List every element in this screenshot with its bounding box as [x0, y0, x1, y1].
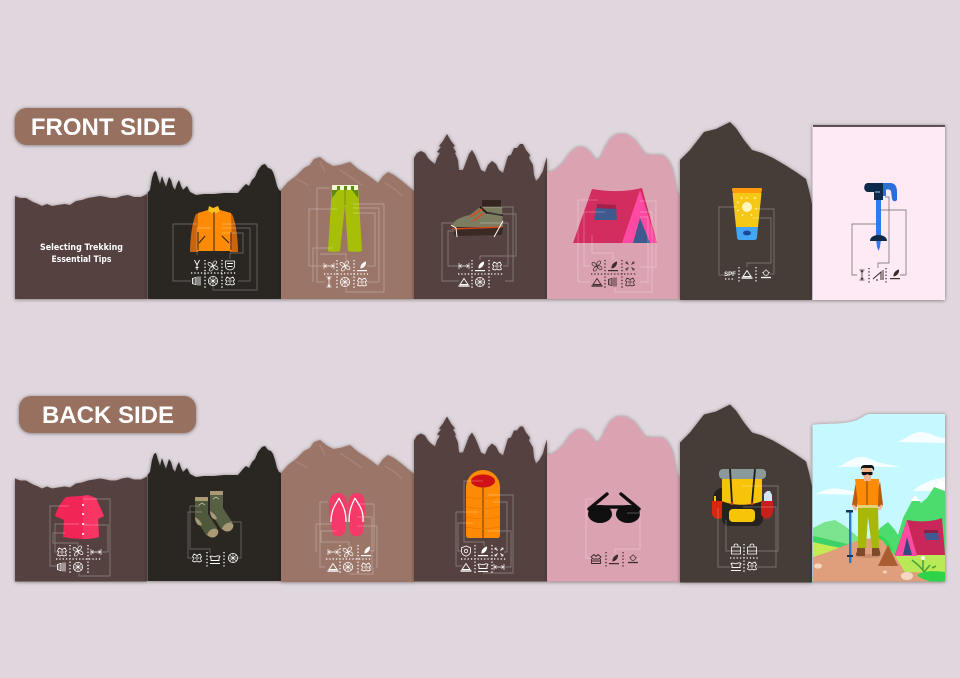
- rock cone: [878, 545, 898, 566]
- icon: sunglasses: [588, 494, 640, 523]
- icon: shirt: [55, 495, 104, 539]
- leader lines: [718, 486, 778, 567]
- icon grid: [591, 552, 638, 567]
- panel: sunglasses: [547, 416, 680, 582]
- icon: flip-flops: [329, 493, 365, 536]
- panel: sleeping bag: [414, 416, 547, 582]
- icon: tent: [895, 518, 945, 556]
- heading: back side: BACK SIDE: [42, 402, 174, 429]
- rocks and plants: [814, 556, 945, 582]
- text: title block: Essential Tips: [52, 255, 112, 265]
- icon grid: [724, 267, 771, 282]
- panel: hiker scene: [812, 414, 945, 582]
- icon: socks: [195, 491, 233, 538]
- icon: jacket: [190, 206, 238, 252]
- leader lines: [852, 197, 906, 275]
- icon: trousers: [328, 185, 362, 252]
- clouds: [815, 432, 945, 495]
- icon: boot: [451, 200, 503, 237]
- panel: backpack: [680, 404, 812, 582]
- heading: back side: [19, 396, 196, 433]
- leader lines: [442, 207, 516, 281]
- icon grid: [860, 268, 900, 283]
- leader lines: [173, 224, 257, 290]
- panel: shirt: [15, 476, 147, 582]
- panel: jacket: [148, 164, 281, 299]
- leader lines: [316, 502, 377, 574]
- panel: sandals: [281, 440, 414, 582]
- leader lines: [309, 188, 384, 292]
- icon: sleeping bag: [466, 470, 500, 538]
- panel: tent: [547, 134, 680, 299]
- heading: front side: FRONT SIDE: [31, 114, 176, 141]
- icon grid: [191, 260, 237, 288]
- icon grid: [460, 545, 506, 573]
- icon grid: [591, 260, 636, 288]
- text: title block: Selecting Trekking: [40, 243, 123, 253]
- leader lines: [719, 207, 774, 275]
- panel: socks: [148, 446, 281, 581]
- leader lines: [586, 499, 640, 559]
- icon: sunscreen tube: [732, 188, 762, 240]
- panel: sunscreen: [680, 122, 812, 300]
- ground: [813, 538, 945, 582]
- panel: trekking pole: [812, 125, 945, 300]
- hills: [813, 478, 945, 573]
- panel: intro text: [15, 194, 147, 299]
- icon grid: SPF: [724, 272, 736, 278]
- icon grid: [192, 552, 238, 567]
- leader lines: [50, 499, 110, 576]
- panel: trousers: [281, 157, 414, 299]
- leader lines: [188, 506, 241, 558]
- icon grid: [730, 544, 758, 572]
- icon grid: [326, 545, 372, 573]
- panel: boots: [414, 134, 547, 299]
- icon grid: [458, 260, 503, 288]
- leader lines: [456, 481, 513, 573]
- icon: hiker: [852, 465, 883, 558]
- leader lines: [578, 200, 656, 292]
- icon: backpack: [712, 469, 773, 526]
- icon: trekking pole: [846, 510, 853, 563]
- icon grid: [324, 260, 368, 288]
- icon grid: [56, 545, 102, 573]
- heading: front side: [15, 108, 192, 145]
- icon: tent: [573, 188, 657, 243]
- icon: trekking pole: [864, 183, 897, 251]
